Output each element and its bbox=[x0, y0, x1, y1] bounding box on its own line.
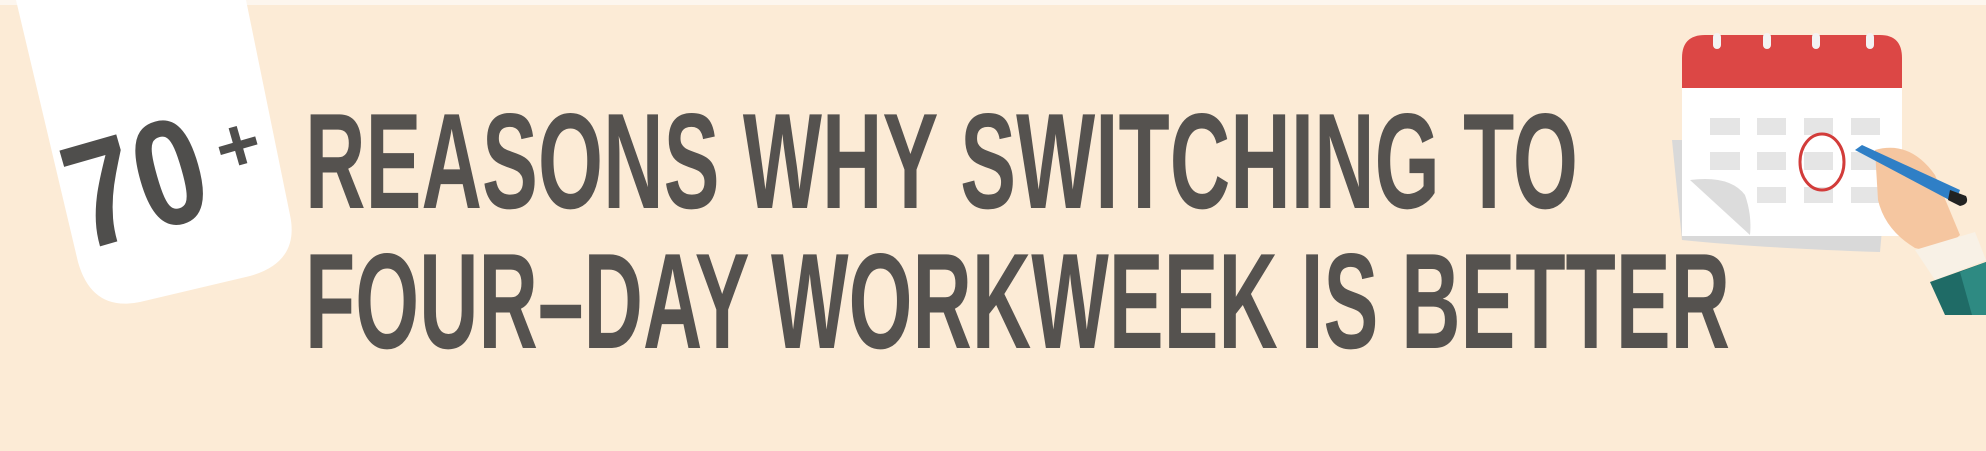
badge: 70+: 70 bbox=[45, 82, 226, 282]
badge: 70+: + bbox=[205, 99, 271, 192]
title bbox=[305, 85, 1730, 377]
badge: 70+ bbox=[16, 0, 292, 304]
icon: calendar with hand bbox=[1672, 33, 1986, 315]
